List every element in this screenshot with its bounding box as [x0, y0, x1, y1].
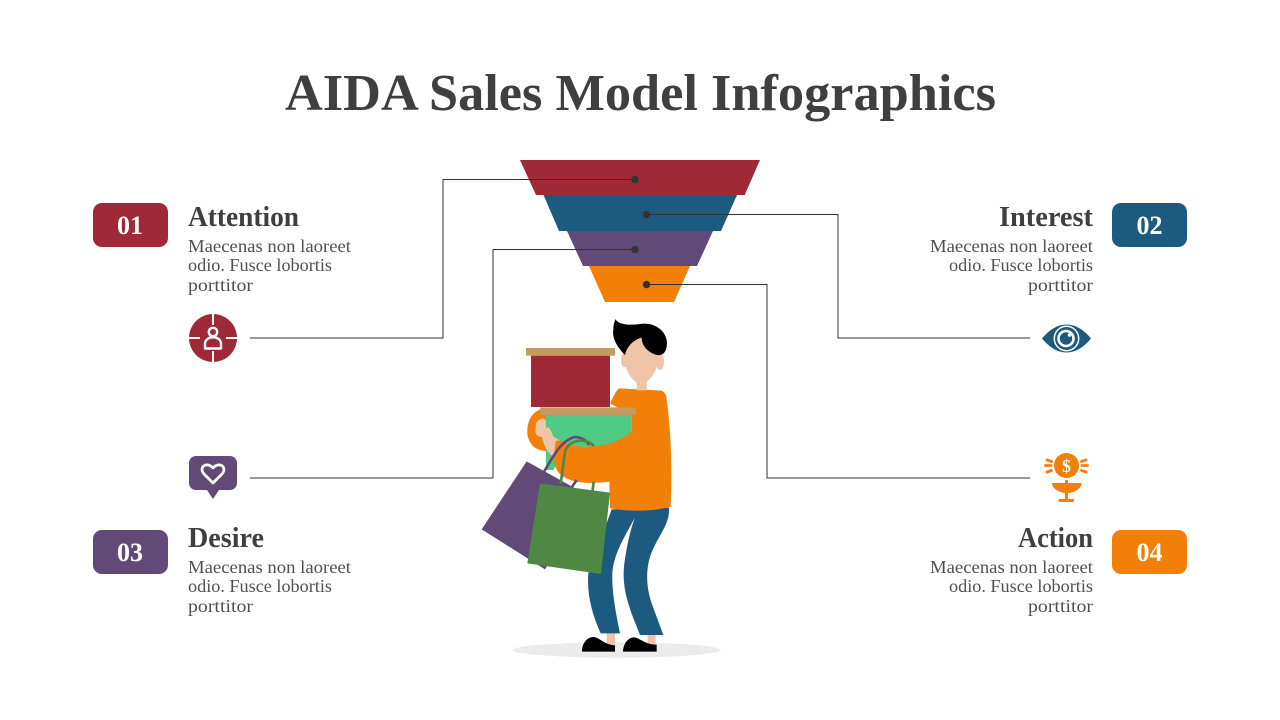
badge 04: 04 — [1136, 538, 1162, 567]
body text: interest: odio. Fusce lobortis — [949, 255, 1093, 275]
panel: attention — [93, 202, 351, 362]
body text: interest: Maecenas non laoreet — [930, 236, 1093, 256]
heading: desire: Desire — [188, 523, 264, 554]
funnel tier: attention — [520, 160, 760, 195]
body text: action: odio. Fusce lobortis — [949, 576, 1093, 596]
badge 03 — [93, 530, 168, 574]
body text: attention: Maecenas non laoreet — [188, 236, 351, 256]
badge 04 — [1112, 530, 1187, 574]
title: AIDA Sales Model Infographics — [285, 65, 996, 122]
connector: interest — [643, 211, 1030, 338]
icon: eye — [1042, 324, 1091, 352]
icon: heart speech bubble — [189, 456, 237, 499]
funnel tier: interest — [544, 195, 737, 231]
badge 01 — [93, 203, 168, 247]
heading: attention: Attention — [188, 202, 299, 233]
funnel — [520, 160, 760, 302]
connector: action — [643, 281, 1030, 478]
icon: money plant — [1046, 453, 1088, 502]
body text: interest: porttitor — [1028, 275, 1093, 295]
badge 03: 03 — [117, 538, 143, 567]
badge 02 — [1112, 203, 1187, 247]
illustration: shopper carrying boxes and bags — [482, 319, 721, 658]
body text: attention: odio. Fusce lobortis — [188, 255, 332, 275]
heading: interest: Interest — [999, 202, 1094, 233]
connector: attention — [250, 176, 639, 338]
funnel tier: desire — [567, 231, 713, 266]
funnel tier: action — [589, 266, 690, 302]
badge 02: 02 — [1136, 211, 1162, 240]
panel: desire — [93, 456, 351, 616]
panel: interest — [930, 202, 1187, 352]
body text: action: porttitor — [1028, 596, 1093, 616]
icon: target person — [189, 314, 237, 362]
badge 01: 01 — [117, 211, 143, 240]
body text: desire: porttitor — [188, 596, 253, 616]
connector: desire — [250, 246, 639, 478]
body text: desire: Maecenas non laoreet — [188, 557, 351, 577]
heading: action: Action — [1018, 523, 1093, 554]
body text: desire — [188, 557, 351, 616]
body text: interest — [930, 236, 1093, 295]
body text: attention: porttitor — [188, 275, 253, 295]
body text: desire: odio. Fusce lobortis — [188, 576, 332, 596]
icon: money plant: $ — [1062, 456, 1071, 476]
body text: action — [930, 557, 1093, 616]
body text: action: Maecenas non laoreet — [930, 557, 1093, 577]
body text: attention — [188, 236, 351, 295]
panel: action — [930, 453, 1187, 616]
